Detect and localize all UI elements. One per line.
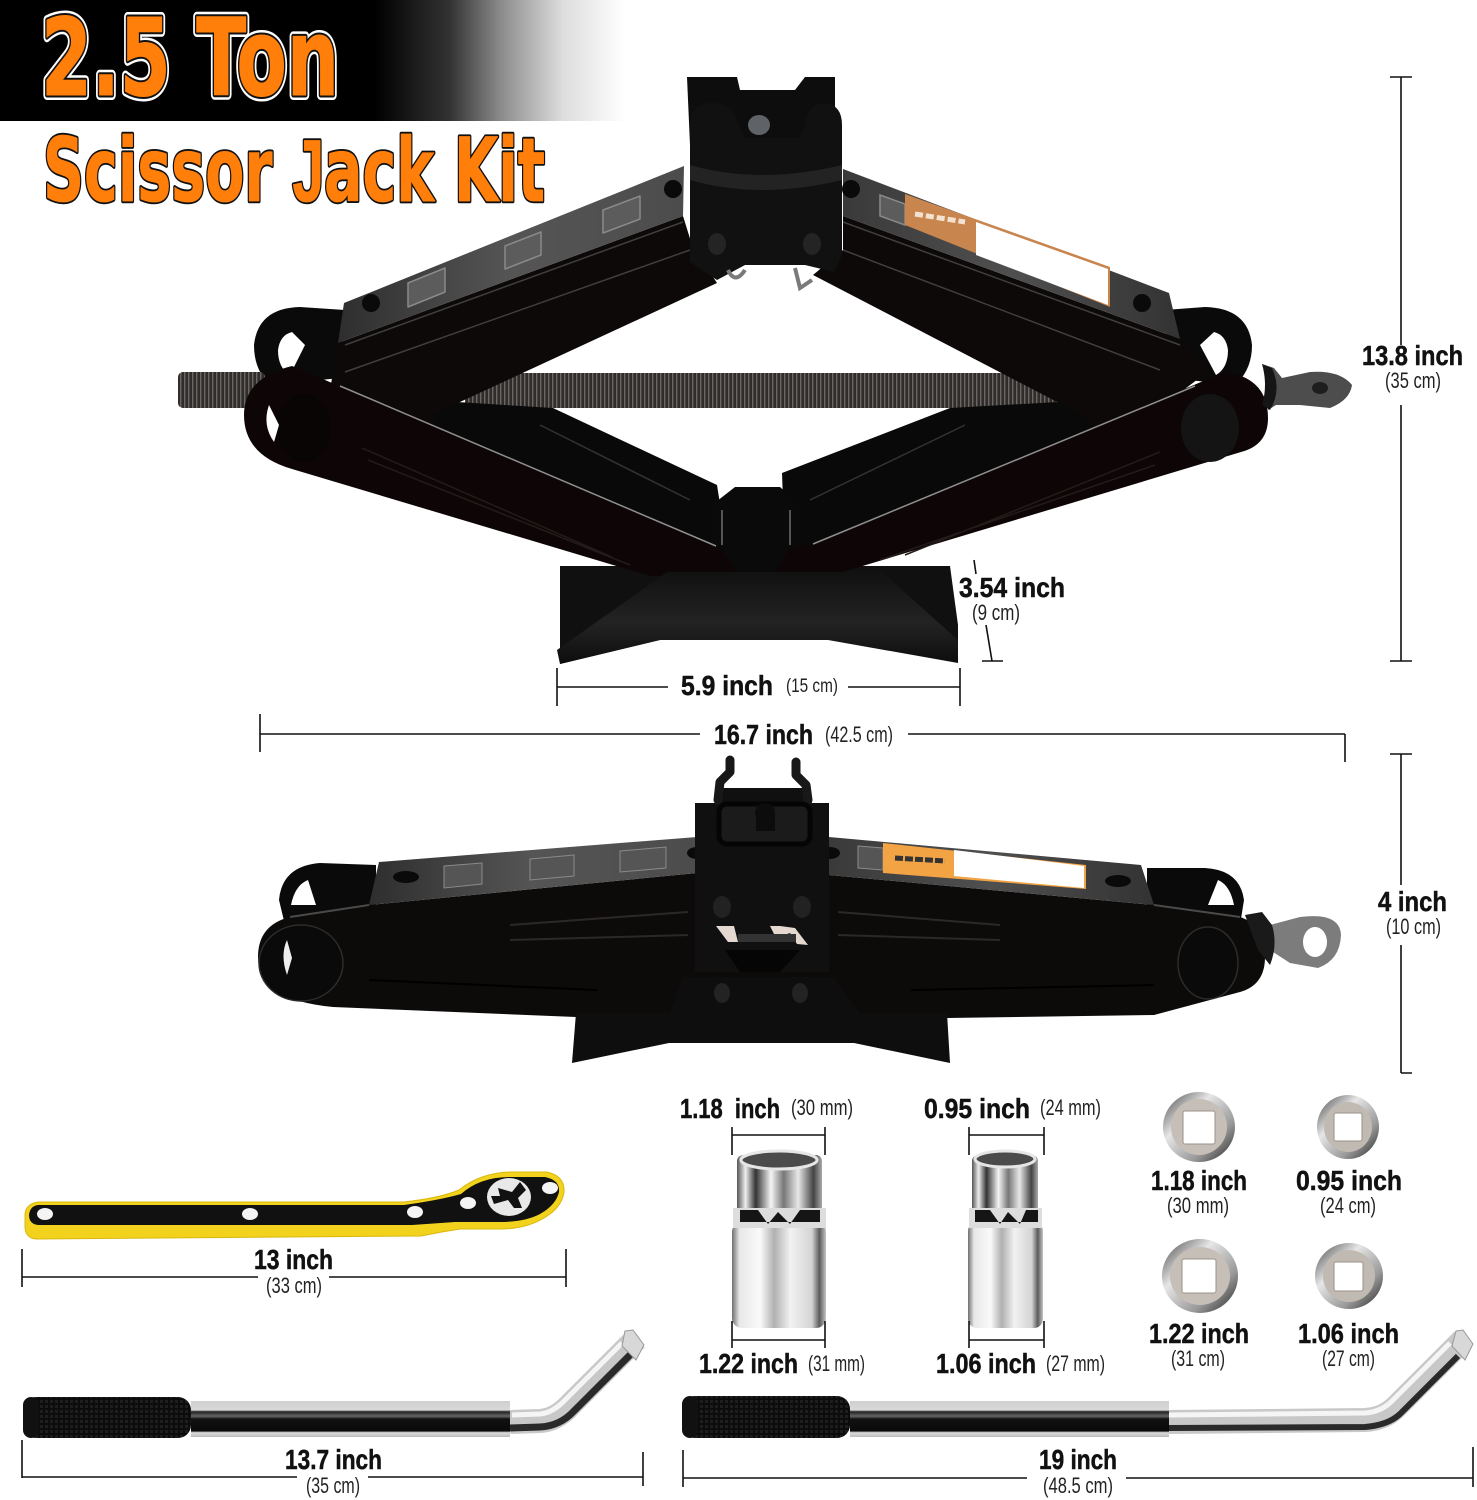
orange warning label [905,194,1110,307]
silver clips and screw [716,926,808,972]
0.95 inch socket top dimension [924,1093,1101,1155]
ratchet holes [37,1182,558,1220]
19 inch dimension: (48.5 cm) [1043,1473,1113,1498]
end view labels: (27 cm) [1322,1346,1375,1371]
socket end view 1.22 inch [1162,1239,1238,1313]
3.54 inch dimension: 3.54 inch [959,572,1065,603]
end view labels: 1.06 inch [1298,1318,1399,1349]
16.7 inch dimension: 16.7 inch [714,719,813,750]
ratchet wrench [25,1172,564,1239]
top prongs [718,760,808,800]
title: 2.5 Ton: 2.5 Ton [41,0,339,121]
4 inch dimension: (10 cm) [1386,914,1441,939]
13 inch dimension: 13 inch [254,1244,333,1275]
16.7 inch dimension: (42.5 cm) [825,722,893,747]
top saddle block [690,103,842,280]
3.54 inch dimension: (9 cm) [972,600,1020,625]
jack body [258,873,1265,1018]
raised scissor jack [178,77,1352,664]
13.7 inch dimension: (35 cm) [306,1473,360,1498]
long lug wrench [682,1330,1473,1438]
center block [695,788,829,972]
short lug wrench [23,1330,644,1438]
16.7 inch dimension [260,714,1345,762]
end view labels: 1.18 inch [1151,1165,1247,1196]
grey faces [369,837,1154,905]
19 inch dimension [683,1444,1473,1498]
13.8 inch dimension: (35 cm) [1385,368,1441,393]
body relief lines [290,905,1240,990]
13 inch dimension: (33 cm) [266,1273,322,1298]
front right arm [772,372,1268,576]
saddle shading [690,165,842,288]
saddle bolt [748,115,770,135]
ratchet black face [29,1177,559,1225]
rubber grip [682,1396,850,1438]
threaded screw [178,372,1057,408]
1.06 inch socket bottom dimension: (27 mm) [1046,1351,1105,1376]
top saddle back [687,77,840,145]
arm highlights [340,386,1195,565]
end view labels: 0.95 inch [1296,1165,1402,1196]
tube [850,1401,1169,1437]
base saddle [572,977,950,1063]
end view labels: 1.22 inch [1149,1318,1249,1349]
socket right [968,1151,1043,1328]
upper left arm side [330,216,717,440]
1.18 inch socket top dimension [680,1093,853,1155]
lowered scissor jack [258,760,1341,1063]
end view labels [1149,1165,1402,1371]
1.18 inch socket top dimension: 1.18 inch [680,1093,780,1124]
upper arm grey faces [338,166,1180,372]
back rings [254,307,1252,385]
back rings [279,863,1244,925]
end view labels: (30 mm) [1167,1193,1229,1218]
5.9 inch dimension: 5.9 inch [681,670,773,701]
title: Scissor Jack Kit: Scissor Jack Kit [43,119,545,222]
1.18 inch socket top dimension: (30 mm) [791,1095,853,1120]
end view labels: (24 cm) [1320,1193,1376,1218]
end view labels: (31 cm) [1171,1346,1225,1371]
0.95 inch socket top dimension: 0.95 inch [924,1093,1030,1124]
4 inch dimension [1378,754,1447,1073]
socket end view 0.95 inch [1317,1095,1379,1159]
locking loop [719,803,810,844]
0.95 inch socket top dimension: (24 mm) [1040,1095,1101,1120]
4 inch dimension: 4 inch [1378,886,1447,917]
bent bar [1169,1340,1463,1428]
bent bar [510,1339,636,1428]
center lower mechanism [712,487,800,575]
rivets [713,896,811,1003]
base rivets [714,983,808,1003]
front left arm [244,366,738,576]
pivot caps [259,925,1238,1001]
5.9 inch dimension [557,668,960,706]
1.22 inch socket bottom dimension [699,1321,865,1379]
back lower arms [425,400,1095,555]
orange warning label [883,843,1086,889]
tube [191,1401,510,1437]
socket tip [622,1330,644,1360]
title: Scissor Jack Kit: Scissor Jack Kit [43,119,545,222]
title: 2.5 Ton: 2.5 Ton [41,0,339,121]
5.9 inch dimension: (15 cm) [786,676,838,697]
13.7 inch dimension: 13.7 inch [285,1444,382,1475]
pivot caps [266,394,1239,462]
1.06 inch socket bottom dimension: 1.06 inch [936,1348,1036,1379]
socket left [732,1151,826,1328]
ratchet yellow body [25,1172,564,1239]
3.54 inch dimension [959,560,1065,661]
eye bolt [1262,364,1352,410]
13.8 inch dimension [1362,77,1463,661]
eye bolt [1245,912,1341,968]
socket tip [1452,1330,1473,1360]
1.22 inch socket bottom dimension: 1.22 inch [699,1348,798,1379]
upper right arm side [813,216,1210,430]
title: 2.5 Ton [41,0,339,121]
1.06 inch socket bottom dimension [936,1321,1105,1379]
rubber grip [23,1397,191,1438]
ratchet socket [487,1178,531,1216]
title: 2.5 Ton: 2.5 Ton [41,0,339,121]
header band [0,0,625,121]
13.7 inch dimension [22,1440,643,1498]
socket end view 1.06 inch [1315,1243,1383,1309]
1.22 inch socket bottom dimension: (31 mm) [808,1351,865,1376]
socket end view 1.18 inch [1163,1092,1235,1162]
base back plate [560,566,958,664]
19 inch dimension: 19 inch [1039,1444,1117,1475]
base saddle [557,572,958,664]
13 inch dimension [22,1244,566,1298]
